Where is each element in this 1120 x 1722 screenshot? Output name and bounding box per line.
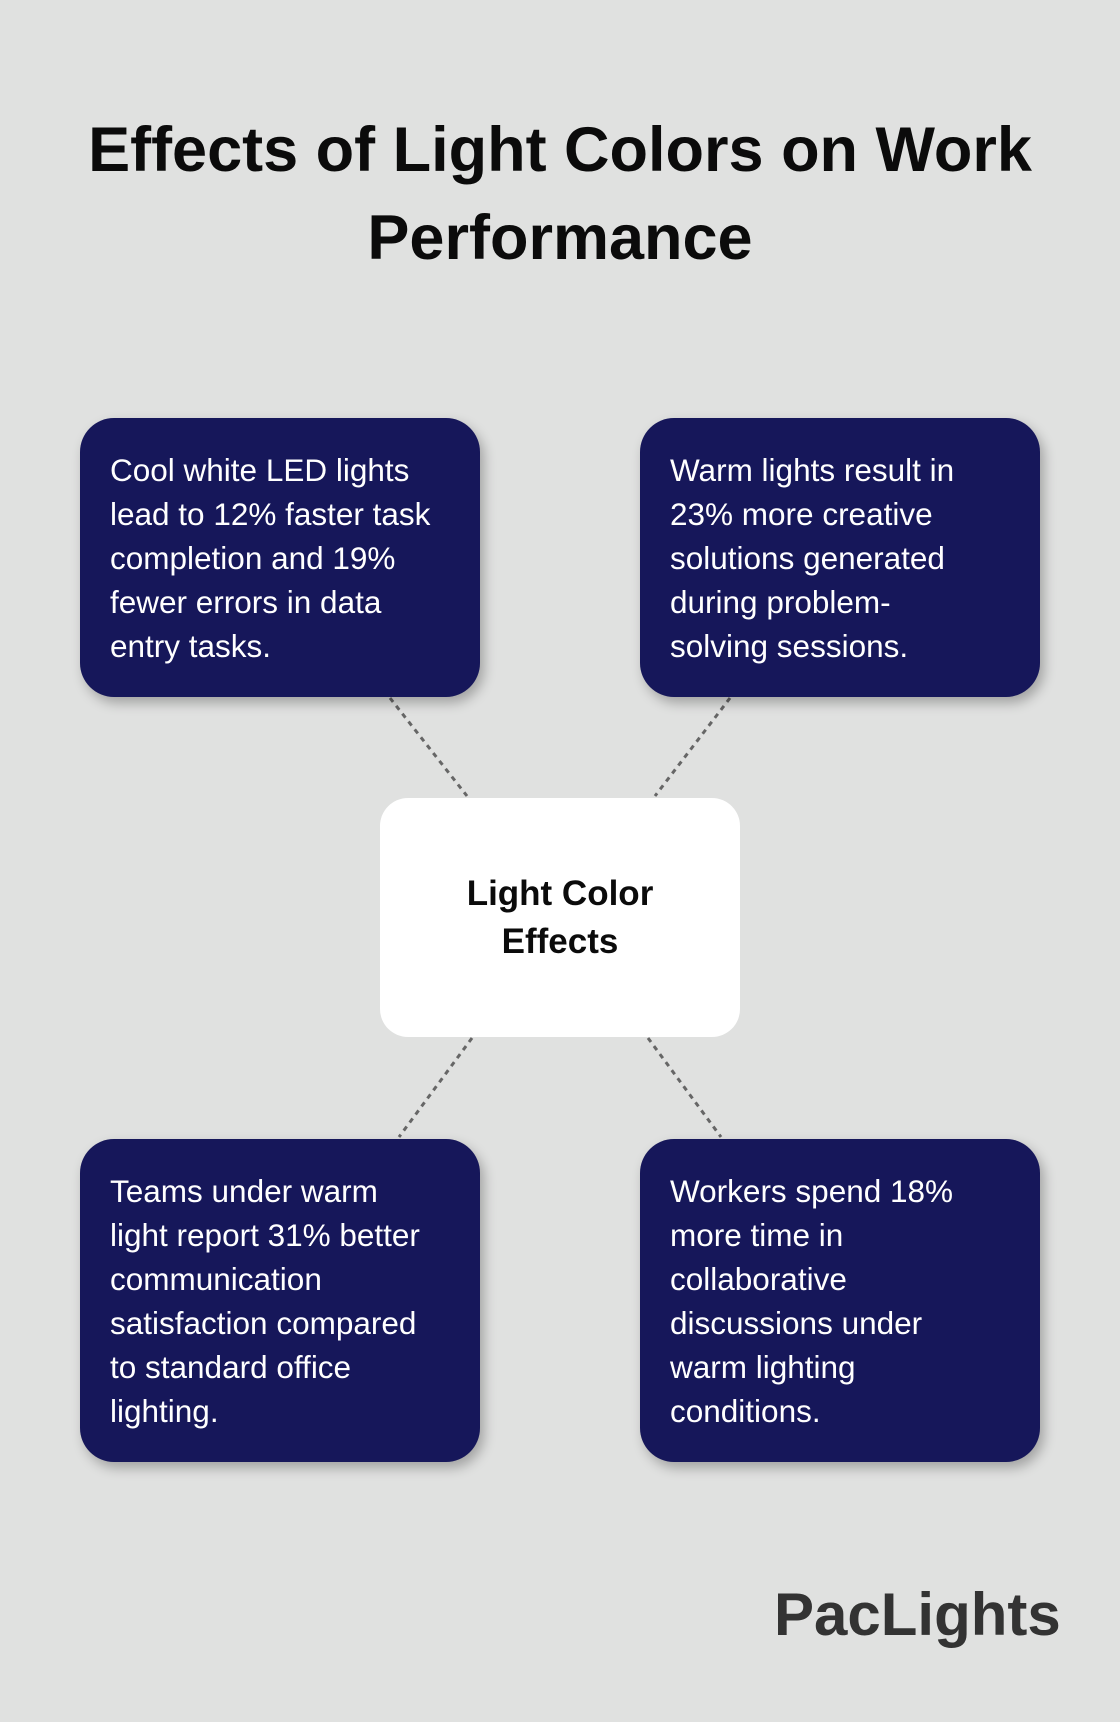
panel: bottom-left: light report 31% better [110,1216,420,1252]
panel: top-left: fewer errors in data [110,584,381,620]
panel: top-left: Cool white LED lights [110,452,409,488]
center node: Light Color [467,874,653,912]
center node [380,798,740,1037]
panel: top-right: 23% more creative [670,496,933,532]
panel: bottom-left: Teams under warm [110,1172,378,1208]
title: Performance [367,203,753,273]
panel: bottom-right: conditions. [670,1392,821,1428]
panel: top-right: solving sessions. [670,628,908,664]
center node: Effects [502,922,618,960]
panel: bottom-right: collaborative [670,1260,847,1296]
title: Effects of Light Colors on Work [88,115,1032,185]
panel: top-left: entry tasks. [110,628,271,664]
panel: bottom-right: discussions under [670,1304,922,1340]
panel: bottom-right: warm lighting [670,1348,856,1384]
logo: PacLights [774,1581,1061,1648]
panel: bottom-left: to standard office [110,1348,351,1384]
title [88,115,1032,273]
panel: top-left: lead to 12% faster task [110,496,430,532]
panel: bottom-right [640,1139,1040,1462]
panel: bottom-right: more time in [670,1216,843,1252]
panel: bottom-right: Workers spend 18% [670,1172,953,1208]
panel: top-right: solutions generated [670,540,945,576]
panel: top-left [80,418,480,697]
panel: top-right: Warm lights result in [670,452,954,488]
panel: top-left: completion and 19% [110,540,395,576]
panel: bottom-left: communication [110,1260,322,1296]
panel: bottom-left: satisfaction compared [110,1304,416,1340]
panel: top-right [640,418,1040,697]
panel: bottom-left [80,1139,480,1462]
panel: bottom-left: lighting. [110,1392,219,1428]
panel: top-right: during problem- [670,584,891,620]
